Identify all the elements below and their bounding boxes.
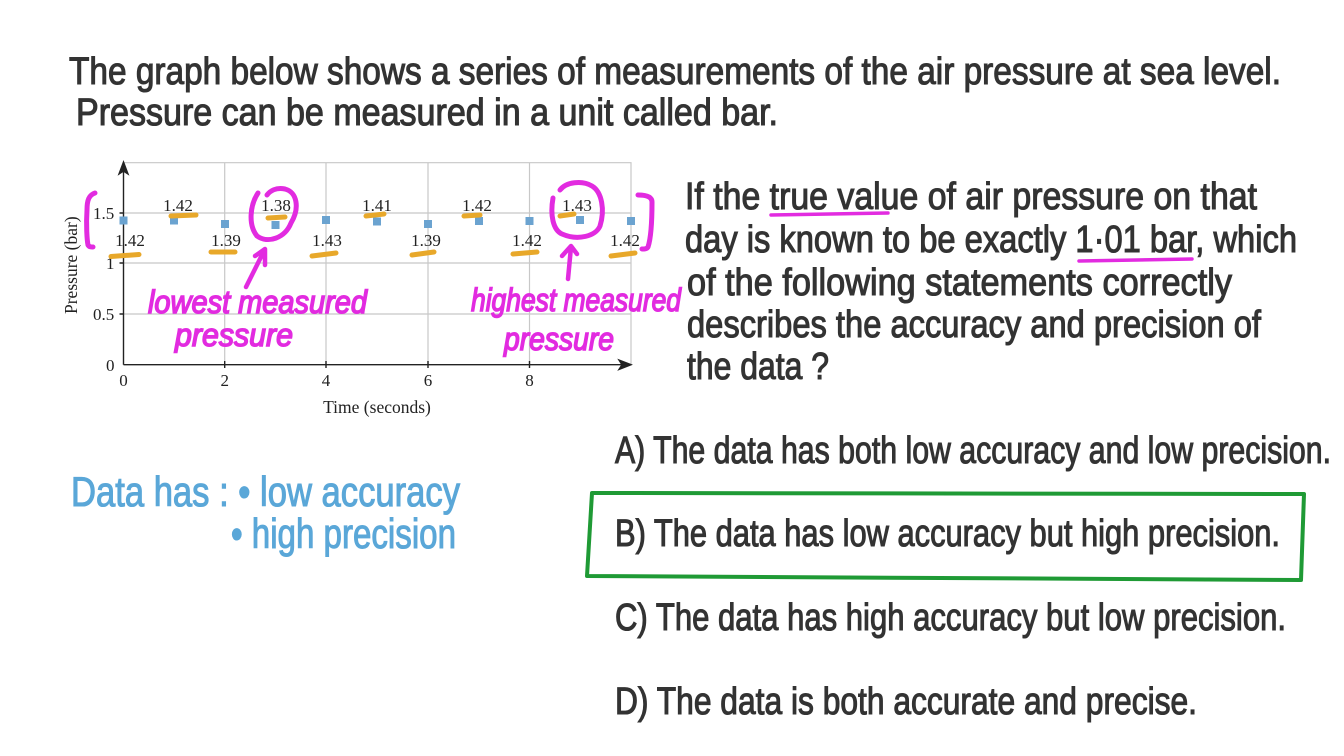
data labels: 1.41	[362, 196, 392, 215]
arrow: to lowest value	[246, 249, 265, 287]
axis tick labels: 6	[424, 371, 432, 390]
data labels: 1.42	[462, 196, 492, 215]
question text: the data ?	[687, 346, 829, 388]
axis titles	[61, 216, 431, 417]
answer: conclusion note	[71, 468, 460, 557]
orange underlines	[111, 214, 635, 256]
data labels: 1.42	[610, 231, 640, 250]
axis tick labels: 2	[220, 371, 229, 390]
axis tick labels: 8	[525, 371, 534, 390]
title: problem statement	[69, 51, 1281, 134]
data labels	[115, 196, 640, 250]
question text: If the true value of air pressure on that	[685, 176, 1257, 218]
data labels: 1.43	[312, 231, 342, 250]
label: lowest measured pressure: lowest measured	[148, 284, 368, 320]
label: highest measured pressure: highest measured	[471, 282, 682, 318]
label: lowest measured pressure	[148, 284, 368, 353]
question text	[685, 176, 1297, 388]
annotation: range brackets	[87, 193, 652, 249]
axis tick labels	[93, 204, 534, 390]
data points	[120, 216, 635, 229]
axis tick labels: 1.5	[93, 204, 114, 223]
axis tick labels: 0	[106, 356, 114, 375]
annotation: circle around highest value	[552, 183, 602, 237]
chart: pressure against time	[61, 162, 640, 417]
axis tick labels: 1	[106, 254, 114, 273]
label: highest measured pressure: pressure	[503, 321, 614, 357]
axis tick labels: 0.5	[93, 305, 114, 324]
question text: describes the accuracy and precision of	[687, 304, 1261, 346]
correct answer box	[587, 493, 1304, 580]
data labels: 1.42	[512, 231, 542, 250]
data labels: 1.42	[115, 231, 145, 250]
data labels: 1.39	[411, 231, 441, 250]
axis tick labels: 0	[119, 371, 128, 390]
answer: conclusion note: Data has : • low accuracy	[71, 468, 460, 515]
answer options	[615, 430, 1331, 723]
title: problem statement: Pressure can be measured in a unit called bar.	[76, 92, 778, 134]
annotation: circle around lowest value	[251, 188, 296, 240]
option D: D) The data is both accurate and precise.	[615, 681, 1197, 723]
axis titles: Time (seconds)	[323, 397, 431, 417]
data labels: 1.43	[562, 196, 592, 215]
highlight: question underlines	[771, 213, 1192, 261]
data labels: 1.39	[211, 231, 241, 250]
label: lowest measured pressure: pressure	[174, 317, 293, 353]
data labels: 1.42	[163, 196, 193, 215]
axis titles: Pressure (bar)	[61, 216, 81, 314]
data labels: 1.38	[261, 196, 291, 215]
chart axes	[119, 162, 631, 369]
answer: conclusion note: • high precision	[231, 510, 456, 557]
question text: of the following statements correctly	[687, 262, 1232, 304]
label: highest measured pressure	[471, 282, 682, 357]
axis tick labels: 4	[322, 371, 331, 390]
arrow: to highest value	[562, 246, 577, 279]
